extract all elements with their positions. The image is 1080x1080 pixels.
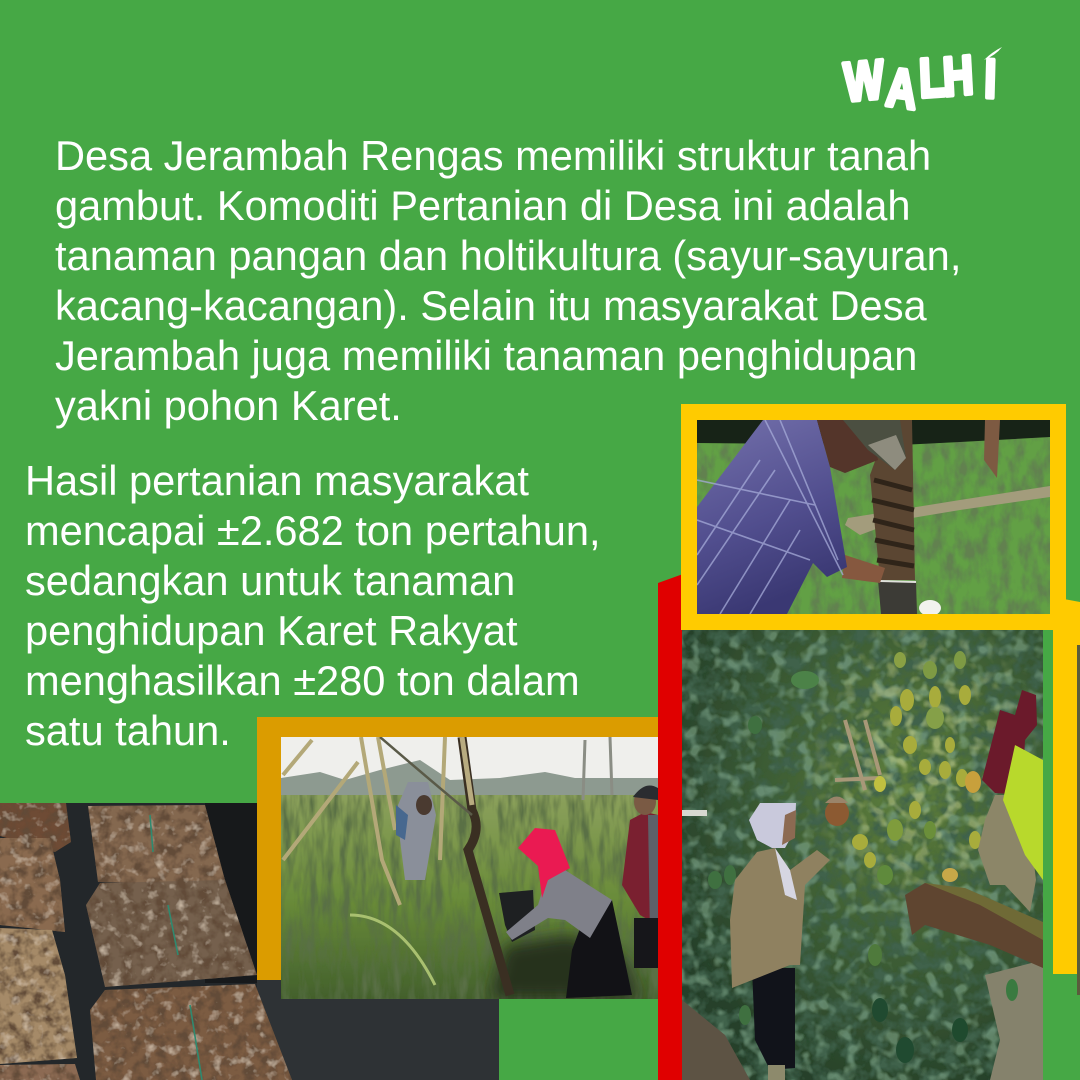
fallen palm frond bbox=[905, 883, 1043, 968]
text block: intro paragraph: yakni pohon Karet. bbox=[55, 382, 402, 429]
frame: yellow border around rubber tapping photo bbox=[681, 404, 1066, 630]
frame: orange border around peatland photo bbox=[257, 717, 658, 980]
text block: intro paragraph bbox=[55, 132, 961, 429]
yellow accent band bbox=[1053, 597, 1080, 974]
woman in white headscarf and plaid jacket bbox=[730, 803, 830, 1080]
tapper arm bbox=[842, 555, 885, 583]
text block: intro paragraph: kacang-kacangan). Selain itu masyarakat Desa bbox=[55, 282, 927, 329]
text block: harvest figures: menghasilkan ±280 ton dalam bbox=[25, 657, 580, 704]
text block: harvest figures bbox=[25, 457, 601, 754]
man behind vines bbox=[825, 796, 849, 826]
text block: intro paragraph: Jerambah juga memiliki tanaman penghidupan bbox=[55, 332, 917, 379]
text block: harvest figures: penghidupan Karet Rakyat bbox=[25, 607, 518, 654]
man head and cap bbox=[817, 420, 906, 473]
photo: peat blocks in water bbox=[0, 803, 499, 1080]
text block: intro paragraph: gambut. Komoditi Pertanian di Desa ini adalah bbox=[55, 182, 910, 229]
text block: harvest figures: sedangkan untuk tanaman bbox=[25, 557, 515, 604]
decorative dark base bbox=[490, 935, 640, 999]
text block: harvest figures: satu tahun. bbox=[25, 707, 231, 754]
text block: intro paragraph: tanaman pangan dan holtikultura (sayur-sayuran, bbox=[55, 232, 961, 279]
photo: pepper vines and farmers bbox=[682, 630, 1043, 1080]
woman with pink headscarf bbox=[506, 828, 632, 998]
text block: harvest figures: mencapai ±2.682 ton pertahun, bbox=[25, 507, 601, 554]
text block: harvest figures: Hasil pertanian masyarakat bbox=[25, 457, 529, 504]
photo: workers in peat swamp bbox=[281, 737, 658, 999]
banana leaf bbox=[1003, 745, 1043, 880]
person in red shirt on ladder bbox=[978, 690, 1037, 912]
man in red shirt bbox=[622, 785, 658, 968]
photo sliver at right edge bbox=[1077, 645, 1080, 995]
person in grey hoodie bbox=[396, 782, 436, 880]
latex cup bbox=[919, 600, 941, 616]
decorative dirt path bbox=[845, 486, 1050, 535]
decorative leaves bbox=[708, 651, 1018, 1063]
photo: man tapping a rubber tree bbox=[697, 420, 1050, 614]
green corner block bbox=[499, 999, 658, 1080]
decorative branches bbox=[283, 737, 445, 905]
rubber tree trunk bbox=[870, 420, 917, 614]
decorative ground and wood bbox=[682, 1000, 750, 1080]
plaid shirt bbox=[697, 420, 847, 614]
red accent band bbox=[658, 574, 683, 1080]
text block: intro paragraph: Desa Jerambah Rengas memiliki struktur tanah bbox=[55, 132, 931, 179]
black bucket bbox=[499, 890, 535, 942]
